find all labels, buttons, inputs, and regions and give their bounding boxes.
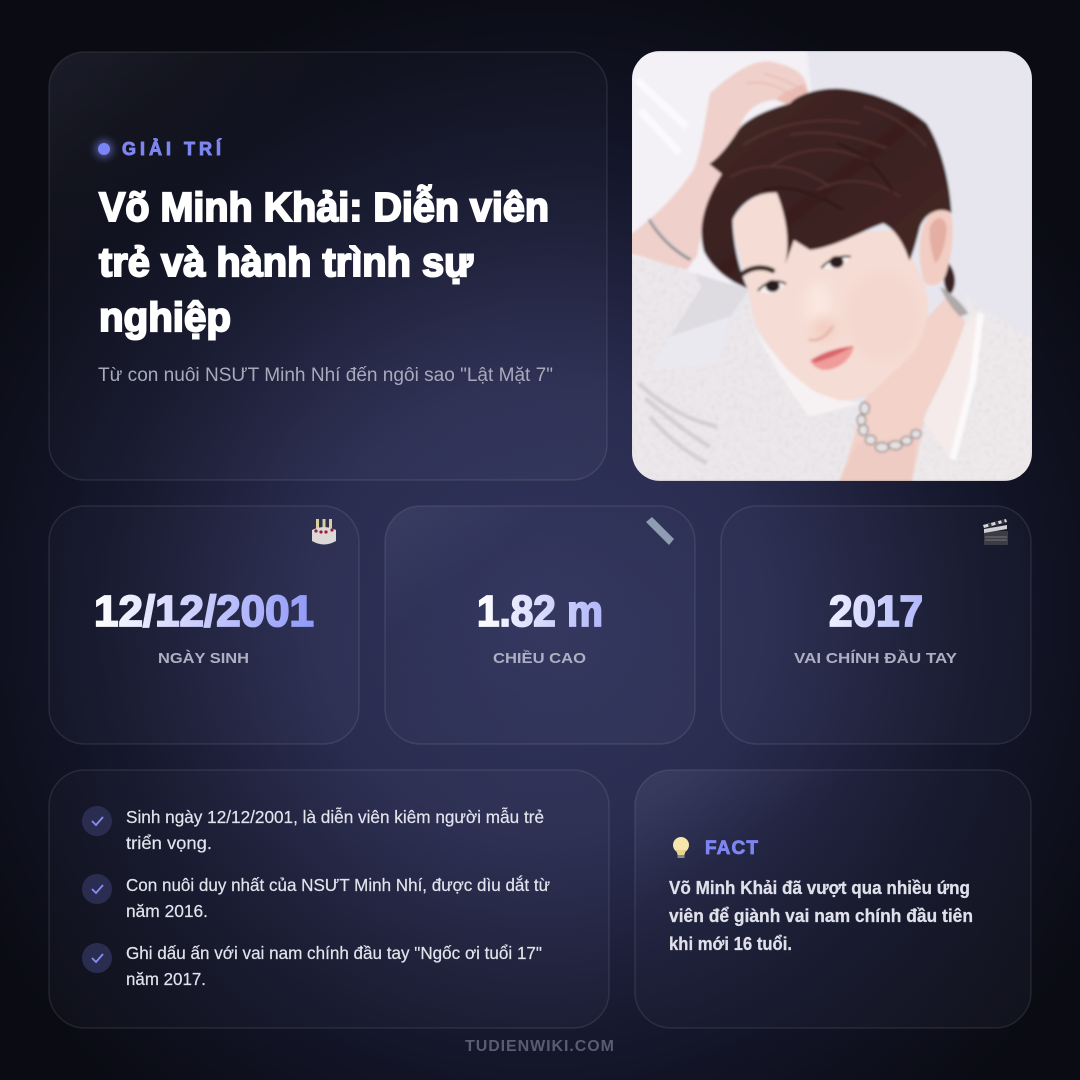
photo: portrait illustration [632, 51, 1032, 481]
value: 1.82 m [477, 587, 603, 636]
icon: ruler [646, 517, 674, 545]
panel: title card [49, 52, 607, 480]
panel: key points [49, 770, 609, 1028]
fact label: FACT [705, 838, 758, 859]
label: CHIỀU CAO [493, 650, 586, 667]
necklace [857, 402, 921, 452]
fact text: viên để giành vai nam chính đầu tiên [669, 906, 973, 926]
label: NGÀY SINH [158, 650, 249, 667]
bullet 2: Con nuôi duy nhất của NSƯT Minh Nhí, được dìu dắt từ [126, 874, 550, 895]
bullet 1 [82, 806, 544, 853]
stat card: height [385, 506, 695, 744]
bullet 1: triển vọng. [126, 833, 212, 853]
face [733, 193, 929, 400]
bullet 2 [82, 874, 550, 921]
bullet 3: Ghi dấu ấn với vai nam chính đầu tay "Ngốc ơi tuổi 17" [126, 943, 542, 963]
bullet 3 [82, 943, 542, 989]
heading: nghiệp [99, 294, 231, 340]
grey shadow zone under arm [672, 274, 747, 336]
icon: light bulb [673, 837, 689, 858]
footer credit: TUDIENWIKI.COM [465, 1038, 614, 1055]
shirt [630, 256, 862, 482]
hair back [944, 260, 955, 293]
heading: Võ Minh Khải: Diễn viên [99, 184, 549, 230]
fact text: Võ Minh Khải đã vượt qua nhiều ứng [669, 878, 970, 898]
panel: fact [635, 770, 1031, 1028]
category tag: GIẢI TRÍ [122, 138, 222, 159]
fact text [669, 878, 973, 954]
icon: clapperboard [983, 519, 1008, 545]
label: VAI CHÍNH ĐẦU TAY [794, 650, 957, 667]
nose [809, 326, 833, 340]
hair [702, 88, 952, 288]
ear [919, 209, 953, 285]
value: 12/12/2001 [94, 587, 314, 636]
value: 2017 [829, 587, 923, 636]
arm and hand [630, 61, 808, 270]
stat card: first lead role [721, 506, 1031, 744]
fact text: khi mới 16 tuổi. [669, 934, 792, 954]
icon: birthday cake [312, 519, 336, 544]
bullet 3: năm 2017. [126, 969, 206, 989]
stat card: birth date [49, 506, 359, 744]
bullet 1: Sinh ngày 12/12/2001, là diễn viên kiêm người mẫu trẻ [126, 806, 544, 827]
heading [99, 184, 549, 340]
subtitle: Từ con nuôi NSƯT Minh Nhí đến ngôi sao "Lật Mặt 7" [98, 365, 553, 386]
bullet 2: năm 2016. [126, 901, 208, 921]
heading: trẻ và hành trình sự [99, 239, 473, 285]
brows and eyes [742, 268, 773, 274]
neck and chest [844, 298, 966, 474]
lips [810, 346, 854, 370]
